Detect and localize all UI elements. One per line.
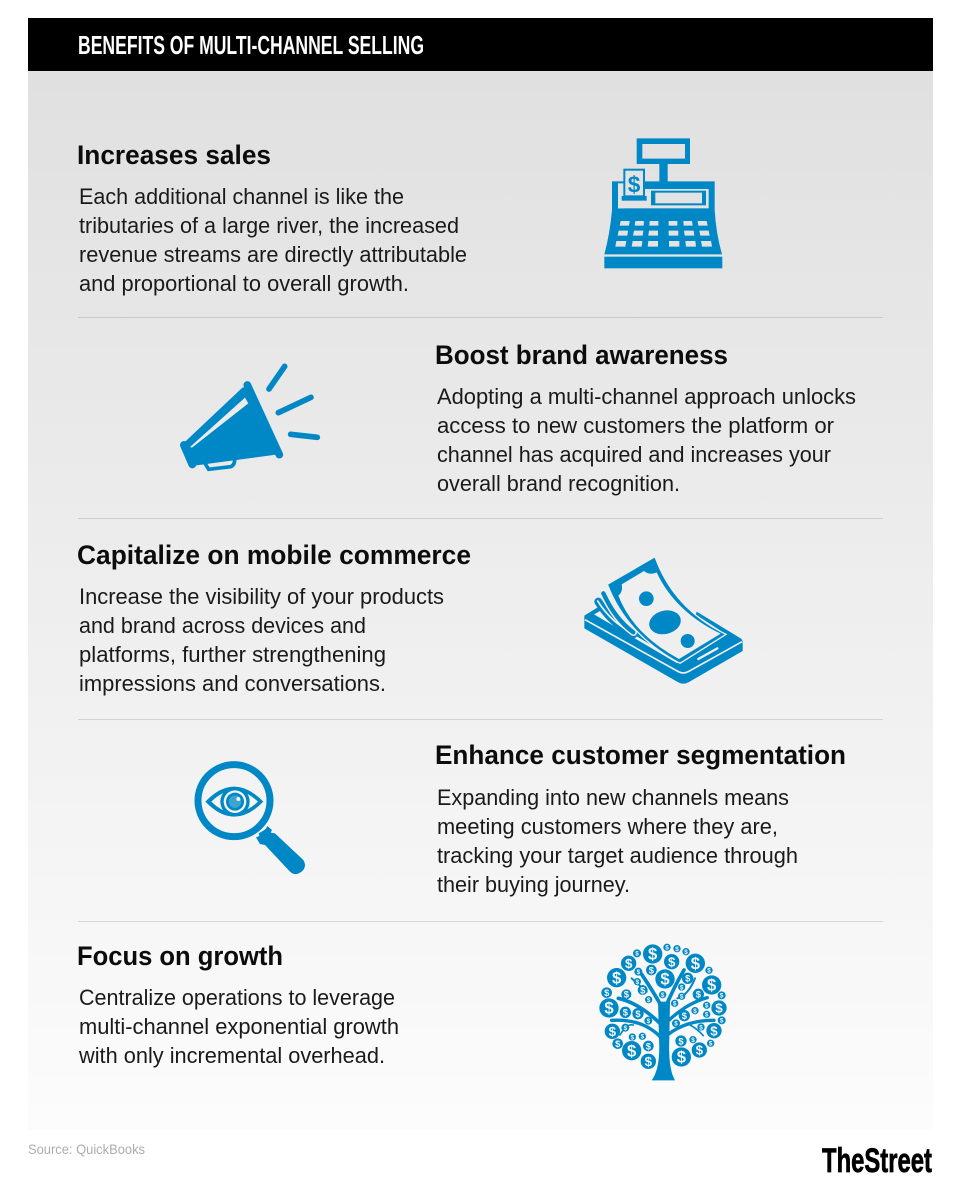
text: boost brand awareness: Adopting a multi-channel approach unlocks (437, 384, 856, 409)
icon: money tree: $ (707, 976, 717, 995)
icon: money tree: $ (635, 1009, 641, 1019)
icon: money tree: $ (647, 997, 651, 1004)
icon: money tree: $ (720, 1018, 724, 1025)
text: focus on growth: with only incremental overhead. (78, 1043, 385, 1068)
icon: money tree: $ (693, 1008, 697, 1015)
icon: money tree: $ (677, 1048, 687, 1067)
divider (78, 317, 883, 318)
heading: enhance customer segmentation: Enhance customer segmentation (435, 740, 846, 770)
icon: money tree: $ (705, 1003, 709, 1010)
icon: money tree: $ (637, 969, 641, 976)
icon: money tree: $ (674, 1021, 678, 1028)
text: increases sales: revenue streams are directly attributable (79, 242, 467, 267)
icon: money tree: $ (625, 956, 633, 971)
text: increases sales: Each additional channel is like the (79, 184, 404, 209)
panel: enhance customer segmentation (198, 740, 846, 897)
icon: cash on smartphone (584, 557, 743, 684)
text: boost brand awareness: channel has acquired and increases your (437, 442, 831, 467)
icon: money tree: $ (648, 945, 658, 964)
icon: money tree: $ (636, 979, 640, 986)
icon: money tree: $ (627, 1041, 637, 1060)
title: BENEFITS OF MULTI-CHANNEL SELLING (78, 30, 424, 60)
icon: money tree: $ (604, 999, 614, 1018)
divider (78, 518, 883, 519)
text: enhance customer segmentation: their buying journey. (437, 872, 630, 897)
panel: boost brand awareness (183, 340, 856, 496)
icon: money tree: $ (707, 968, 711, 975)
text: focus on growth: Centralize operations to leverage (79, 985, 395, 1010)
icon: money tree: $ (646, 1041, 652, 1051)
text: enhance customer segmentation (437, 785, 798, 897)
icon: money tree: $ (715, 1001, 723, 1016)
text: focus on growth: multi-channel exponential growth (79, 1014, 399, 1039)
icon: money tree: $ (673, 1001, 677, 1008)
icon: cash register (604, 138, 722, 268)
panel: increases sales (77, 138, 722, 296)
divider (78, 719, 883, 720)
icon: money tree: $ (710, 1023, 718, 1038)
icon: money tree: $ (699, 1024, 703, 1031)
icon: money tree: $ (685, 974, 691, 984)
icon: megaphone (183, 366, 317, 469)
heading: focus on growth: Focus on growth (77, 941, 283, 971)
text: increases sales: and proportional to overall growth. (79, 271, 409, 296)
icon: money tree: $ (623, 1008, 629, 1018)
icon: money tree: $ (609, 1024, 617, 1039)
icon: money tree: $ (705, 1012, 709, 1019)
icon: money tree: $ (612, 968, 622, 987)
icon: money tree: $ (675, 946, 679, 953)
icon: money tree: $ (680, 984, 684, 991)
source note: Source: QuickBooks (28, 1141, 145, 1157)
icon: money tree: $ (678, 1036, 684, 1046)
icon: money tree: $ (696, 990, 702, 1000)
icon: money tree: $ (682, 1011, 688, 1021)
header bar (28, 18, 933, 71)
icon: money tree: $ (720, 993, 724, 1000)
icon: money tree: $ (641, 1034, 645, 1041)
heading: boost brand awareness: Boost brand awareness (435, 340, 728, 370)
icon: cash register: $ (628, 172, 641, 198)
icon: money tree: $ (624, 1025, 628, 1032)
heading: increases sales: Increases sales (77, 140, 271, 170)
text: enhance customer segmentation: meeting customers where they are, (437, 814, 778, 839)
icon: money tree: $ (604, 988, 610, 998)
text: boost brand awareness (437, 384, 856, 496)
icon: money tree: $ (624, 990, 630, 1000)
text: focus on growth (78, 985, 399, 1068)
icon: money tree: $ (665, 945, 669, 952)
panel: capitalize on mobile commerce (77, 540, 743, 696)
text: capitalize on mobile commerce (79, 584, 444, 696)
icon: money tree: $ (640, 985, 646, 995)
text: boost brand awareness: overall brand recognition. (437, 471, 680, 496)
text: capitalize on mobile commerce: impressions and conversations. (79, 671, 386, 696)
icon: money tree: $ (668, 954, 676, 969)
icon: money tree: $ (660, 970, 670, 989)
text: increases sales (79, 184, 467, 296)
icon: money tree: $ (649, 965, 655, 975)
text: boost brand awareness: access to new customers the platform or (437, 413, 834, 438)
text: enhance customer segmentation: tracking your target audience through (437, 843, 798, 868)
icon: money tree: $ (696, 1043, 704, 1058)
icon: money tree (599, 944, 727, 1080)
icon: money tree: $ (691, 1037, 695, 1044)
icon: money tree: $ (691, 954, 701, 973)
icon: money tree: $ (645, 1054, 653, 1069)
icon: money tree: $ (615, 1039, 621, 1049)
text: capitalize on mobile commerce: Increase the visibility of your products (79, 584, 444, 609)
icon: money tree: $ (680, 994, 684, 1001)
icon: money tree: $ (661, 992, 665, 999)
text: capitalize on mobile commerce: and brand across devices and (79, 613, 366, 638)
text: increases sales: tributaries of a large river, the increased (79, 213, 459, 238)
icon: money tree: $ (647, 1018, 651, 1025)
icon: money tree: $ (709, 1041, 713, 1048)
icon: magnifying glass with eye (198, 765, 305, 874)
panel: focus on growth (77, 941, 727, 1080)
icon: money tree: $ (635, 951, 639, 958)
text: capitalize on mobile commerce: platforms, further strengthening (79, 642, 386, 667)
divider (78, 921, 883, 922)
icon: money tree: $ (684, 949, 688, 956)
text: enhance customer segmentation: Expanding into new channels means (437, 785, 789, 810)
icon: money tree: $ (631, 1034, 635, 1041)
heading: capitalize on mobile commerce: Capitalize on mobile commerce (77, 540, 471, 570)
